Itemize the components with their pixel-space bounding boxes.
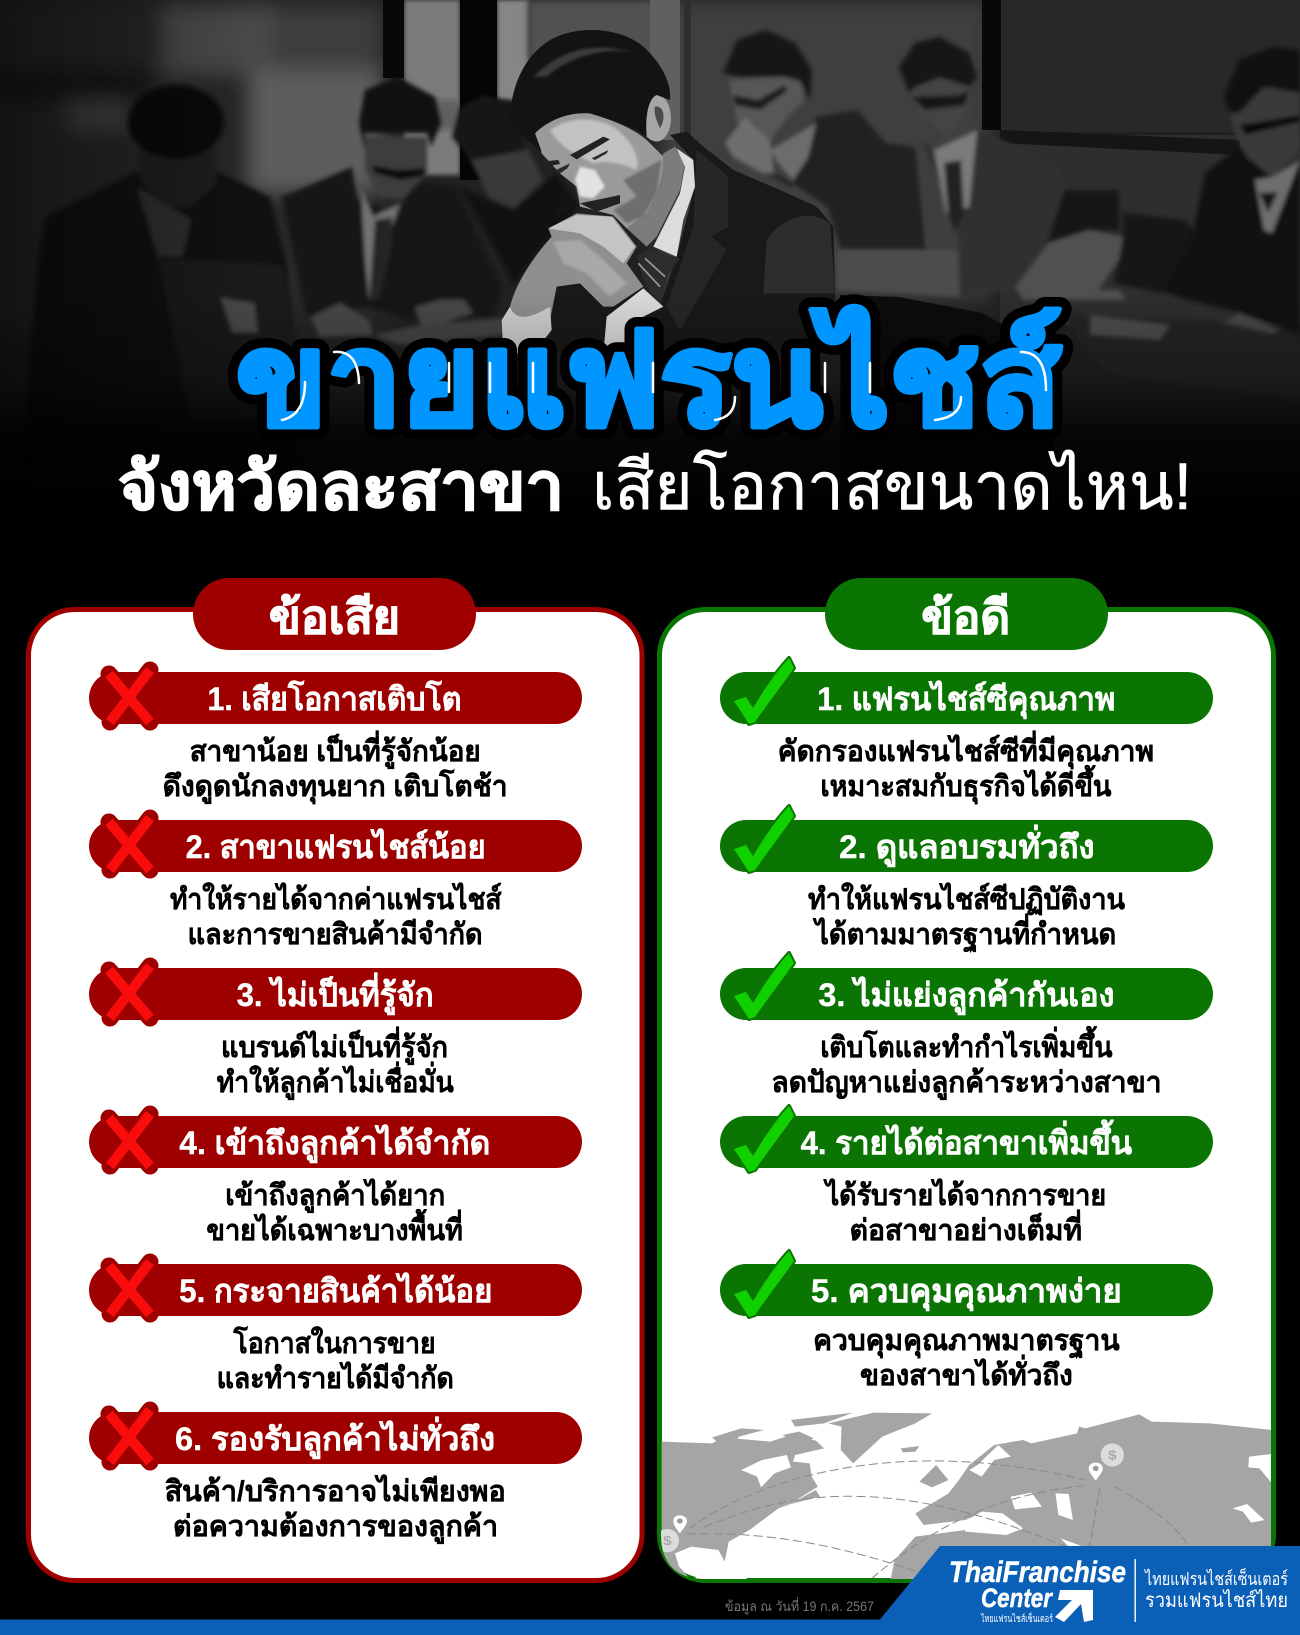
table with papers [1060, 310, 1300, 400]
item 2: 2. ดูแลอบรมทั่วถึง [839, 824, 1095, 868]
world map [656, 1413, 1272, 1580]
item 1: คัดกรองแฟรนไชส์ซีที่มีคุณภาพ [778, 730, 1154, 769]
item 5: 5. กระจายสินค้าได้น้อย [179, 1272, 492, 1309]
subtitle [118, 449, 1192, 523]
ear [646, 95, 671, 141]
item 4: ได้รับรายได้จากการขาย [823, 1178, 1106, 1212]
item 3: ลดปัญหาแย่งลูกค้าระหว่างสาขา [772, 1067, 1162, 1100]
item 5: 5. ควบคุมคุณภาพง่าย [811, 1273, 1122, 1312]
item 5: และทำรายได้มีจำกัด [217, 1361, 454, 1395]
background person 5 [899, 37, 1067, 297]
background person 2 [282, 77, 505, 345]
item 2: 2. สาขาแฟรนไชส์น้อย [186, 828, 486, 865]
main title: ขายแฟรนไชส์ [236, 306, 1062, 453]
item 4: เข้าถึงลูกค้าได้ยาก [225, 1178, 445, 1213]
main title: ขายแฟรนไชส์ [236, 306, 1062, 453]
item 5 [720, 1251, 1213, 1392]
photo: business people in a meeting [0, 0, 1300, 530]
logo arrow [1055, 1590, 1093, 1622]
background person far left [20, 85, 300, 470]
subtitle: เสียโอกาสขนาดไหน! [592, 449, 1192, 523]
background person 3 [452, 95, 580, 285]
heading pill [193, 578, 476, 650]
fan-shaped pale object [1015, 230, 1127, 300]
item 6: สินค้า/บริการอาจไม่เพียงพอ [165, 1474, 506, 1508]
item 5: ควบคุมคุณภาพมาตรฐาน [813, 1325, 1120, 1359]
logo: Center [981, 1583, 1053, 1613]
logo [949, 1556, 1288, 1625]
item 2 [89, 818, 582, 951]
item 1: สาขาน้อย เป็นที่รู้จักน้อย [190, 730, 481, 769]
main man [502, 30, 837, 353]
item 1: ดึงดูดนักลงทุนยาก เติบโตช้า [163, 768, 508, 804]
item 4: ต่อสาขาอย่างเต็มที่ [850, 1209, 1082, 1247]
item 1: 1. เสียโอกาสเติบโต [208, 680, 462, 717]
item 4 [89, 1114, 582, 1247]
item 3 [720, 953, 1213, 1100]
item 2 [720, 806, 1213, 953]
logo: รวมแฟรนไชส์ไทย [1145, 1589, 1288, 1612]
item 3: ทำให้ลูกค้าไม่เชื่อมั่น [217, 1061, 454, 1100]
panel: disadvantages [28, 578, 642, 1580]
item 4: 4. รายได้ต่อสาขาเพิ่มขึ้น [801, 1119, 1132, 1161]
heading pill: ข้อเสีย [269, 591, 400, 643]
item 3: 3. ไม่แย่งลูกค้ากันเอง [818, 976, 1114, 1016]
item 5: โอกาสในการขาย [233, 1325, 436, 1360]
heading pill [825, 578, 1108, 650]
item 1: เหมาะสมกับธุรกิจได้ดีขึ้น [820, 764, 1112, 804]
item 6: ต่อความต้องการของลูกค้า [173, 1511, 498, 1544]
chairs [1048, 190, 1197, 293]
item 4 [720, 1106, 1213, 1247]
world map: $ [1108, 1449, 1117, 1463]
background person 6 [1160, 47, 1300, 343]
item 4: ขายได้เฉพาะบางพื้นที่ [206, 1208, 463, 1247]
laptop light [837, 250, 959, 297]
cuffs [502, 307, 552, 353]
neck [627, 147, 685, 247]
title highlights [282, 352, 1046, 420]
item 3: เติบโตและทำกำไรเพิ่มขึ้น [820, 1025, 1113, 1064]
tie [637, 250, 680, 303]
item 3 [89, 966, 582, 1100]
item 1 [720, 658, 1213, 804]
item 2: ได้ตามมาตรฐานที่กำหนด [812, 913, 1116, 953]
item 3: แบรนด์ไม่เป็นที่รู้จัก [221, 1026, 448, 1065]
item 2: ทำให้แฟรนไชส์ซีปฏิบัติงาน [808, 882, 1125, 916]
item 6: 6. รองรับลูกค้าไม่ทั่วถึง [175, 1416, 495, 1460]
heading pill: ข้อดี [922, 591, 1010, 643]
collar [653, 148, 695, 257]
hair [510, 30, 670, 152]
panel frame [660, 610, 1274, 1580]
item 3: 3. ไม่เป็นที่รู้จัก [237, 972, 434, 1016]
item 2: ทำให้รายได้จากค่าแฟรนไชส์ [170, 882, 502, 916]
item 6 [89, 1410, 582, 1544]
logo: ไทยแฟรนไชส์เซ็นเตอร์ [980, 1611, 1053, 1625]
panel frame [28, 610, 642, 1580]
logo: ThaiFranchise [949, 1556, 1126, 1589]
item 5 [89, 1262, 582, 1395]
item 1 [89, 670, 582, 804]
panel: advantages [656, 578, 1274, 1580]
item 5: ของสาขาได้ทั่วถึง [860, 1354, 1073, 1392]
arms and hands [510, 213, 643, 325]
source note: ข้อมูล ณ วันที่ 19 ก.ค. 2567 [725, 1597, 874, 1615]
item 1: 1. แฟรนไชส์ซีคุณภาพ [817, 680, 1115, 720]
background person 4 [716, 30, 926, 250]
dark foreground chair [840, 295, 1060, 470]
face [535, 113, 663, 228]
footer bar and logo panel [0, 1546, 1300, 1635]
laptop [158, 257, 312, 420]
world map: $ [663, 1534, 672, 1549]
suit [547, 132, 837, 353]
item 2: และการขายสินค้ามีจำกัด [188, 919, 483, 951]
item 4: 4. เข้าถึงลูกค้าได้จำกัด [179, 1124, 490, 1164]
subtitle: จังหวัดละสาขา [118, 449, 564, 523]
